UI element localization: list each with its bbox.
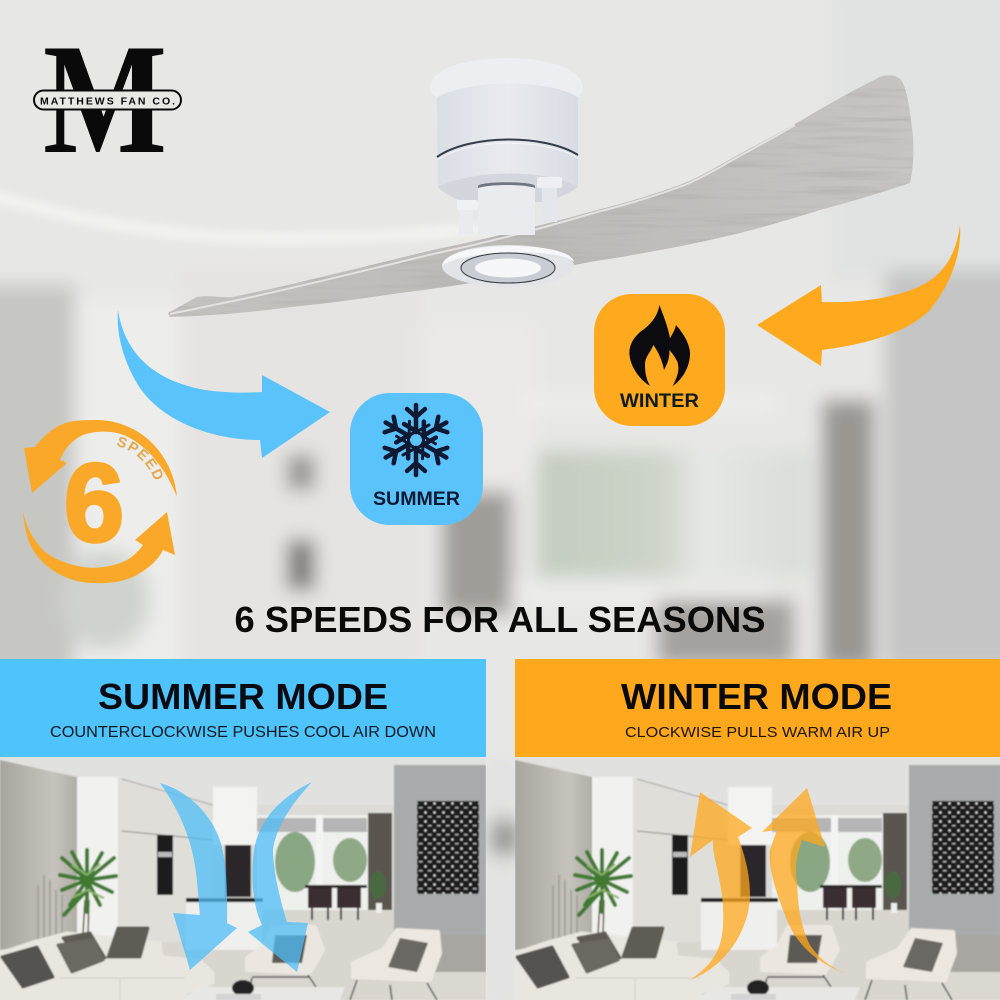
ceiling fan — [168, 58, 913, 317]
arrow: cool air down left — [160, 783, 237, 970]
summer description: COUNTERCLOCKWISE PUSHES COOL AIR DOWN — [50, 724, 436, 741]
summer heading: SUMMER MODE — [98, 676, 388, 717]
logo name pill — [34, 90, 181, 110]
fan motor canopy — [430, 58, 583, 235]
winter heading: WINTER MODE — [621, 676, 892, 717]
logo — [34, 12, 181, 187]
logo name pill: MATTHEWS FAN CO. — [40, 96, 175, 108]
panel: winter mode — [515, 659, 1000, 1000]
big number 6: 6 — [64, 442, 124, 565]
badge: winter — [594, 294, 725, 426]
badge: summer — [350, 393, 483, 525]
icon: 6 speed badge — [23, 420, 177, 584]
arrow: summer airflow — [118, 310, 330, 458]
blade light edge — [170, 125, 795, 314]
ceiling light strip — [0, 195, 520, 238]
arrow: warm air up right — [762, 788, 845, 973]
winter label: WINTER — [620, 391, 699, 412]
winter header band — [515, 659, 1000, 757]
arrow: winter airflow — [757, 225, 960, 366]
top circular arrow — [24, 420, 177, 497]
fan blade — [168, 75, 913, 317]
bottom circular arrow — [23, 510, 175, 583]
summer room scene — [0, 757, 486, 1000]
logo monogram: M — [43, 12, 167, 187]
curved speed label: SPEED — [117, 437, 162, 480]
panel: summer mode — [0, 659, 486, 1000]
winter room scene — [515, 757, 1000, 1000]
fan light ring — [442, 245, 574, 287]
icon: snowflake — [379, 405, 453, 475]
summer label: SUMMER — [373, 489, 460, 510]
winter description: CLOCKWISE PULLS WARM AIR UP — [625, 724, 890, 741]
icon: flame — [629, 305, 690, 386]
arrow: cool air down right — [248, 782, 312, 972]
title: 6 SPEEDS FOR ALL SEASONS — [234, 599, 766, 640]
arrow: warm air up left — [690, 792, 752, 980]
summer header band — [0, 659, 486, 757]
